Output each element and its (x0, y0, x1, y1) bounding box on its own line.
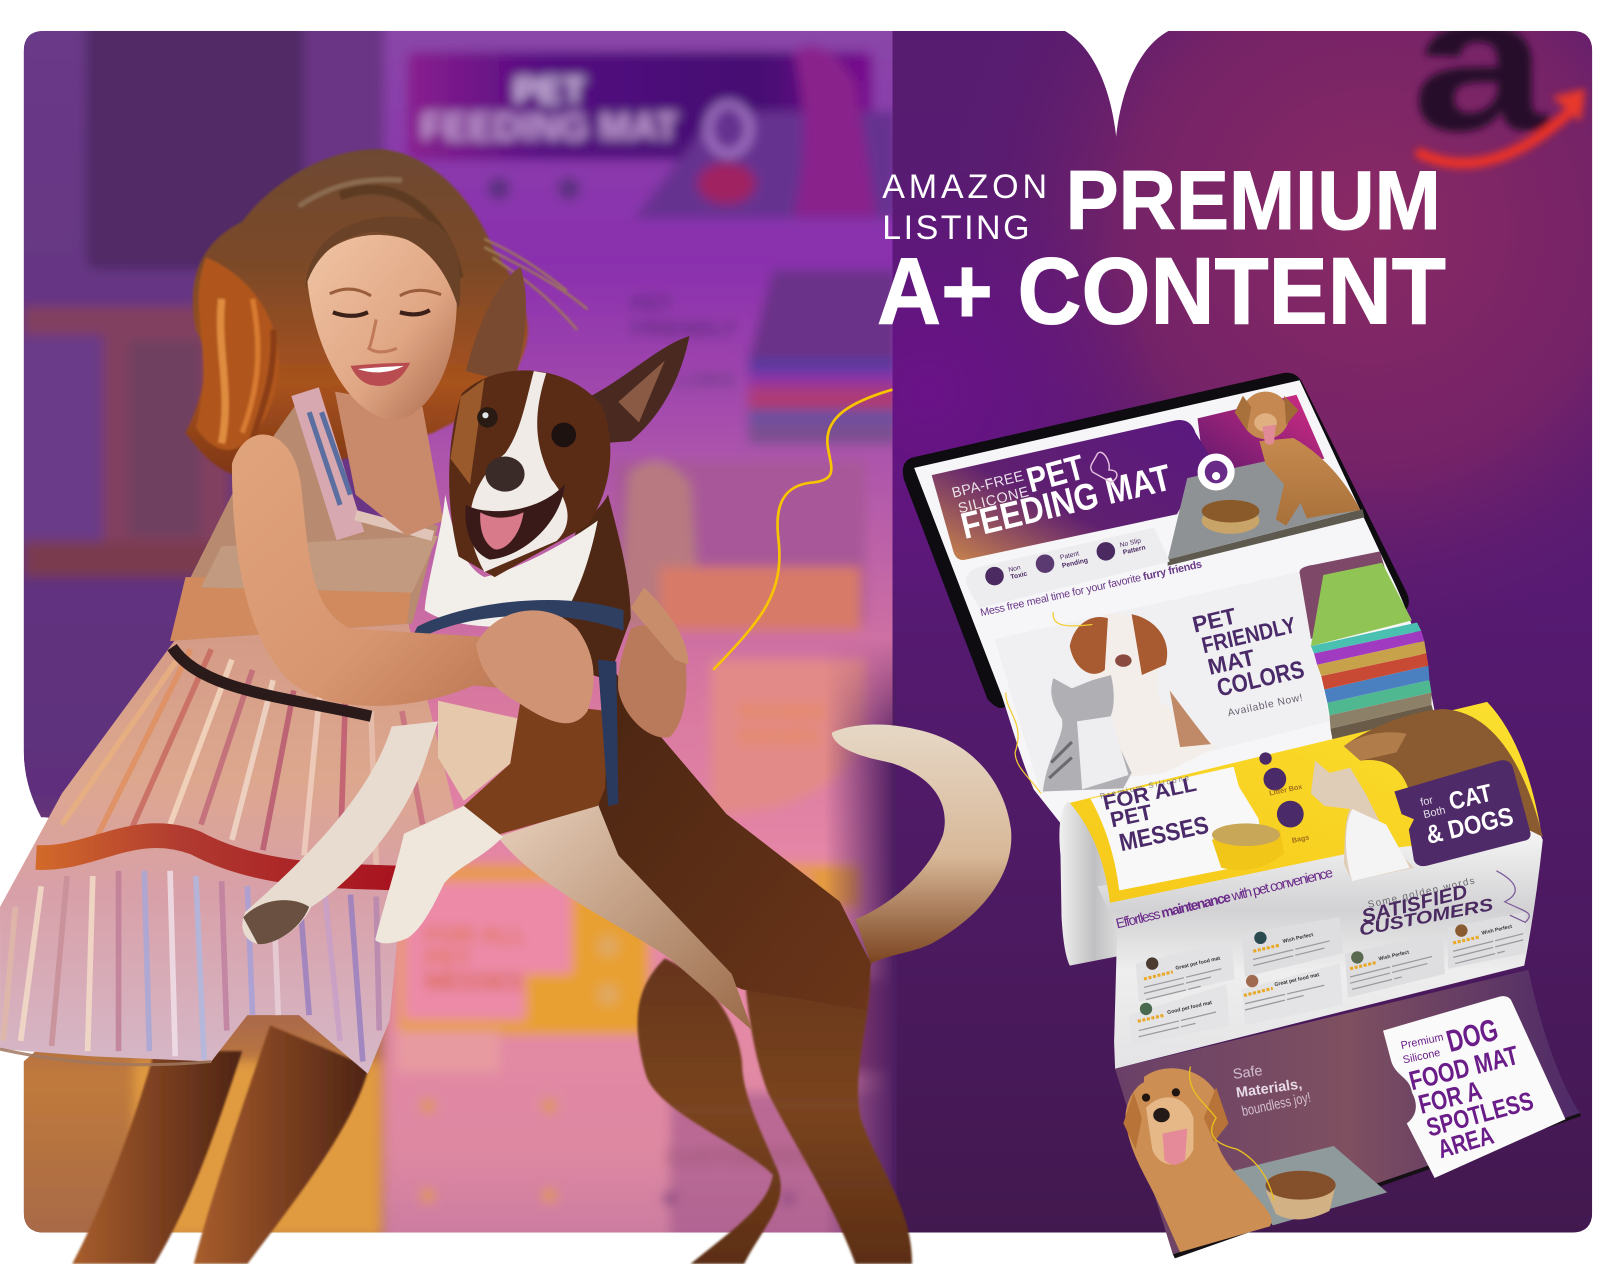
callout text: SPOTLESS (1424, 1087, 1537, 1143)
section card (995, 572, 1329, 794)
yellow doodle (1190, 1067, 1274, 1201)
callout text: Premium (1400, 1031, 1445, 1052)
banner text: FEEDING MAT (957, 456, 1175, 547)
heading a+ content: A+ CONTENT (877, 239, 1446, 345)
text for all pet messes: Premium Silicone (1099, 773, 1190, 801)
ear left (466, 267, 526, 383)
chest brown patch (464, 701, 608, 835)
blurred collage backdrop: FEEDING MAT (421, 106, 678, 149)
paw icons (985, 567, 1004, 585)
torso (598, 660, 871, 1010)
blurred collage backdrop: PET (631, 291, 673, 316)
blurred collage backdrop: FOR ALL (425, 923, 526, 949)
customers heading: CUSTOMERS (1357, 894, 1495, 940)
banner text: BPA-FREE (950, 468, 1025, 502)
blaze (470, 371, 568, 572)
legs (72, 1025, 369, 1264)
amazon logo (1411, 30, 1590, 174)
customers heading: SATISFIED (1359, 881, 1470, 928)
review cards: Great pet food mat (1175, 956, 1221, 972)
blurred collage backdrop: RAISED (740, 698, 826, 724)
cat illustration (1043, 675, 1132, 791)
dog (232, 267, 1011, 1264)
golden dog top (1235, 392, 1360, 526)
eyes (333, 312, 368, 316)
tablet frame (903, 373, 1409, 708)
section heading: FRIENDLY (1199, 611, 1298, 658)
safe materials text: Safe (1232, 1063, 1264, 1083)
badge (1198, 453, 1235, 491)
grey mat lower (1234, 1146, 1387, 1225)
smile (350, 363, 410, 386)
title block (877, 153, 1446, 345)
head (449, 370, 610, 577)
tagline two: Effortless maintenance with pet convenience (1114, 864, 1335, 931)
banner shape (932, 420, 1209, 560)
review cards (1129, 912, 1525, 1046)
skirt red band (36, 836, 402, 878)
cat and dogs text (1419, 780, 1516, 850)
review cards: Wish Perfect (1282, 932, 1314, 945)
section heading: PET (1190, 602, 1239, 638)
amazon smile arrow (1420, 103, 1579, 163)
nose (485, 457, 525, 492)
review stars and titles (1138, 937, 1480, 1021)
section heading: COLORS (1214, 656, 1307, 703)
blurred collage backdrop: FRIENDLY (631, 316, 737, 341)
white callout card (1383, 996, 1565, 1178)
dog illustration (1070, 614, 1216, 778)
purple section (1115, 970, 1581, 1258)
soft right fade of collage (828, 646, 896, 1232)
section heading (1190, 602, 1307, 703)
safe materials text (1232, 1063, 1312, 1120)
features row: Pending (1061, 557, 1089, 570)
neck and chest (335, 392, 443, 536)
cat and dogs text: CAT (1446, 780, 1495, 816)
blurred collage backdrop: PET (425, 947, 471, 973)
product mockup (903, 373, 1581, 1258)
callout text: FOOD MAT (1406, 1040, 1522, 1096)
heart doodle (1091, 452, 1117, 482)
hand front (476, 610, 594, 723)
roll back (1059, 802, 1129, 966)
amazon listing label: LISTING (882, 209, 1030, 247)
harness strap (407, 600, 624, 806)
callout text: AREA (1435, 1122, 1497, 1164)
blurred collage backdrop: PET (513, 69, 586, 111)
grey mat (1168, 460, 1358, 560)
amazon listing label (882, 168, 1047, 247)
cat and dogs text: for (1419, 794, 1435, 809)
belt (172, 647, 371, 716)
doodle (1496, 871, 1529, 922)
purple paw icons: Litter Box (1268, 782, 1303, 798)
safe materials text: boundless joy! (1240, 1090, 1312, 1120)
blurred collage backdrop: MESSES (425, 969, 523, 995)
eyes (477, 407, 498, 428)
hair strands over forehead (305, 217, 460, 309)
small doodle lines (1006, 612, 1092, 794)
reviewer avatars (1146, 957, 1158, 970)
banner text: PET (1023, 448, 1089, 500)
front leg two (375, 806, 503, 943)
cream chest (438, 701, 517, 801)
yellow bowl (1212, 823, 1284, 870)
features row: Toxic (1010, 570, 1028, 581)
bodice (170, 392, 438, 641)
features row (966, 528, 1170, 608)
white lower sheet (1098, 824, 1543, 1069)
golden dog lower (1123, 1068, 1272, 1252)
dog neck dark (546, 495, 631, 680)
features row: Pattern (1122, 544, 1146, 556)
tongue (480, 512, 524, 549)
mat colour strips (1311, 563, 1435, 740)
section heading: MAT (1205, 644, 1257, 680)
mouth (465, 484, 565, 560)
customers heading: Some golden words (1367, 876, 1476, 911)
features row: Non (1008, 564, 1022, 574)
review cards: Wish Perfect (1378, 950, 1410, 962)
face (307, 235, 457, 419)
purple card (1394, 760, 1531, 866)
girl arm (232, 435, 526, 706)
callout text: FOR A (1415, 1075, 1485, 1120)
text for all pet messes: PET (1108, 799, 1154, 832)
tagline: Mess free meal time for your favorite furry friends (979, 558, 1203, 619)
ear right (590, 336, 689, 443)
text for all pet messes: FOR ALL (1101, 773, 1199, 815)
features row: Patent (1059, 550, 1080, 562)
review cards: Wish Perfect (1481, 924, 1513, 937)
text for all pet messes (1099, 773, 1211, 857)
customers heading (1357, 876, 1495, 940)
blurred collage backdrop: EDGES (740, 723, 819, 749)
purple paw icons: Bags (1291, 832, 1310, 845)
blurred collage backdrop: CUSTOMERS (666, 1144, 810, 1170)
cat (1311, 761, 1414, 881)
pet friendly section: Available Now! (1227, 693, 1304, 719)
brown dog (1344, 709, 1543, 837)
cat and dogs text: & DOGS (1423, 803, 1516, 850)
skirt (0, 618, 456, 1074)
amazon listing label: AMAZON (882, 168, 1047, 206)
text for all pet messes: MESSES (1117, 812, 1211, 857)
banner text: SILICONE (957, 484, 1030, 517)
callout text: DOG (1443, 1012, 1502, 1059)
head left orange shade (450, 379, 484, 484)
callout text (1400, 1012, 1537, 1164)
mat colour stack backing (1300, 551, 1393, 639)
purple paw icons (1259, 752, 1310, 845)
features row: No Slip (1119, 537, 1142, 549)
review cards: Great pet food mat (1274, 972, 1320, 988)
front leg one (242, 721, 438, 944)
safe materials text: Materials, (1235, 1076, 1303, 1102)
yellow section (1070, 702, 1543, 903)
review cards: Good pet food mat (1167, 1000, 1213, 1016)
blurred collage backdrop (10, 15, 910, 1252)
white chest (425, 495, 598, 627)
belly cream (498, 804, 752, 1031)
heading premium: PREMIUM (1066, 153, 1441, 247)
pet friendly section (995, 551, 1435, 794)
girl (0, 149, 587, 1264)
rear legs (637, 948, 912, 1264)
white card (1090, 767, 1266, 890)
decorative yellow curve (713, 390, 893, 670)
callout text: Silicone (1402, 1047, 1441, 1066)
dog head (449, 267, 689, 577)
tail (832, 724, 1011, 964)
hair (186, 149, 587, 484)
cat and dogs text: Both (1422, 805, 1447, 821)
hero banner (932, 392, 1365, 566)
skirt stripes (0, 649, 423, 1065)
magenta dog panel (1198, 395, 1324, 484)
bowl (1202, 507, 1259, 534)
kibble bowl lower (1266, 1171, 1336, 1220)
blurred collage backdrop: LORS (675, 367, 735, 392)
paper sheet top (914, 380, 1463, 824)
hand rear (618, 625, 686, 738)
